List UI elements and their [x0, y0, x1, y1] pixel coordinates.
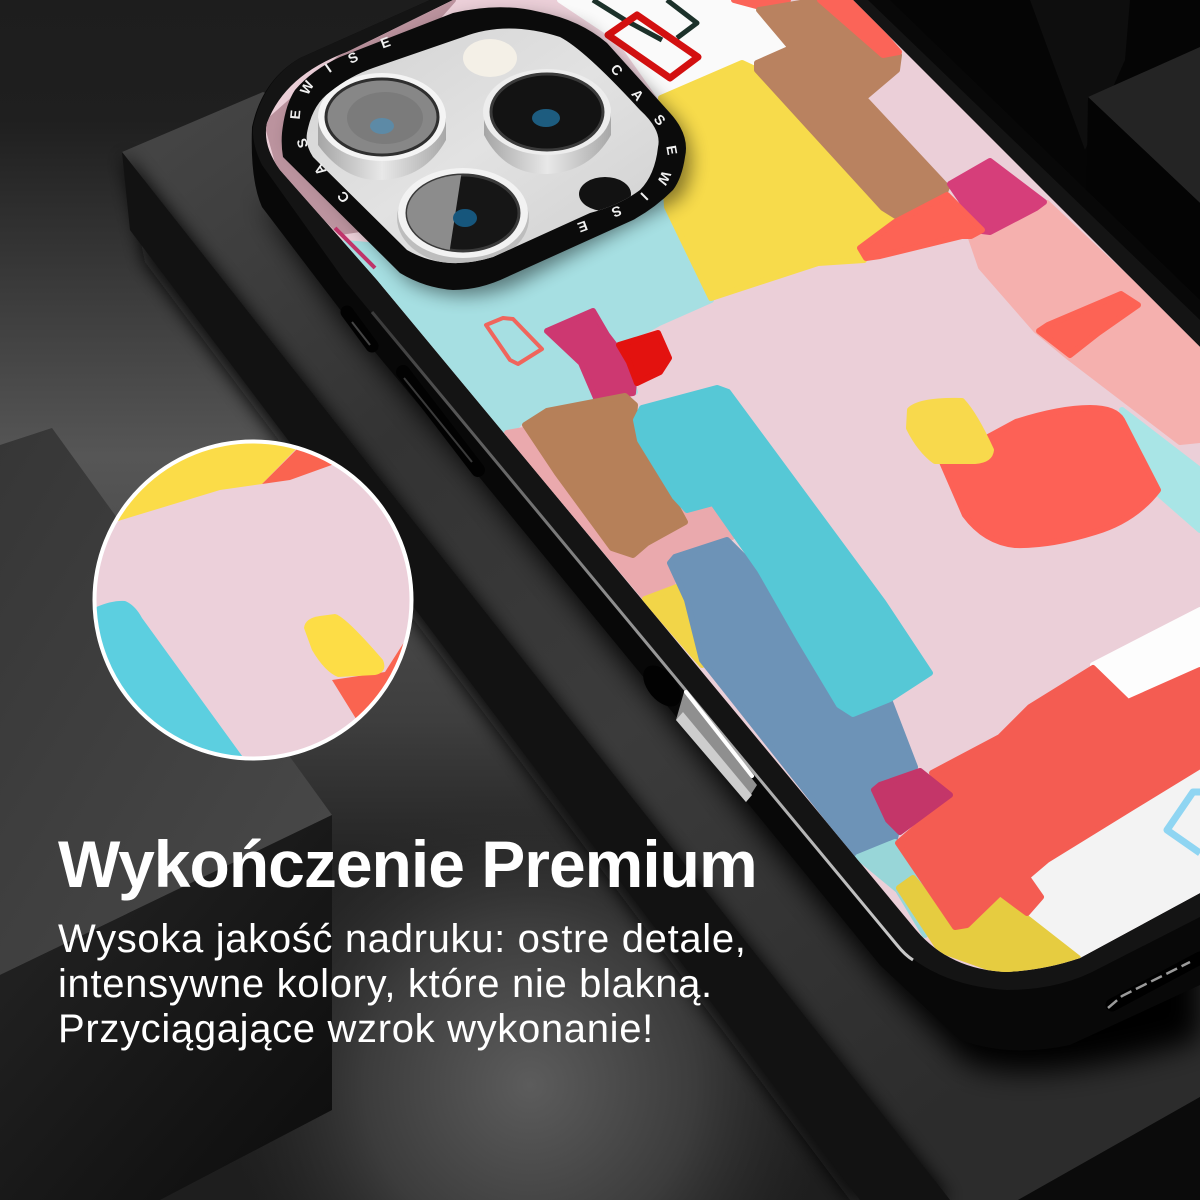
brand text on camera ring: W [654, 169, 675, 188]
print: magenta trim near camera [335, 228, 375, 268]
background pedestal: upper right block [1085, 47, 1200, 420]
print: slate blue [670, 540, 915, 857]
brand text on camera ring: S [293, 137, 311, 150]
print: aqua right [1122, 410, 1200, 530]
brand text on camera ring: C [607, 61, 626, 79]
brand text on camera ring: E [576, 218, 590, 236]
print: white top [560, 0, 791, 98]
print: muted pink edge [267, 0, 453, 232]
print: brown block [525, 396, 685, 555]
print: yellow bottom [899, 878, 1078, 974]
charging port [1108, 958, 1200, 1008]
print: coral top [820, 0, 899, 55]
description text [58, 917, 747, 1051]
print: crimson block [547, 311, 634, 398]
brand text on camera ring: C [334, 188, 353, 206]
print: yellow small [645, 585, 702, 665]
brand text on camera ring [287, 33, 681, 236]
brand text on camera ring: W [296, 77, 317, 97]
lower left block [0, 428, 332, 1200]
print: orange wedge [860, 195, 982, 258]
print: coral top left [734, 0, 788, 7]
print: red block [619, 333, 669, 383]
print: turquoise [636, 388, 930, 714]
print: magenta [950, 161, 1044, 232]
brand text on camera ring: E [663, 144, 681, 156]
brand text on camera ring: E [378, 33, 392, 51]
brand text on camera ring: S [345, 48, 361, 67]
print: light pink right [971, 203, 1200, 442]
print: yellow [661, 63, 895, 298]
brand text on camera ring: A [628, 86, 647, 104]
brand text on camera ring: A [310, 161, 329, 179]
print: coral stripe [1039, 294, 1138, 355]
description text: intensywne kolory, które nie blakną. [58, 962, 713, 1006]
print: magenta small [874, 771, 950, 832]
description text: Przyciągające wzrok wykonanie! [58, 1007, 654, 1051]
description text: Wysoka jakość nadruku: ostre detale, [58, 917, 747, 961]
brand text on camera ring: E [287, 109, 303, 120]
phone case [252, 0, 1200, 1084]
print: aqua [345, 190, 711, 436]
camera island [282, 7, 686, 290]
print: white lower band [1093, 610, 1200, 700]
heading: Wykończenie Premium [58, 827, 757, 901]
brand text on camera ring: I [322, 60, 334, 76]
print: coral blob [942, 408, 1158, 545]
silver button [636, 659, 688, 713]
magnified print detail circle [90, 430, 420, 770]
phone shadow [262, 200, 1200, 1072]
side buttons [347, 312, 757, 802]
dark upper right backdrop [780, 0, 1200, 420]
camera ring [282, 7, 686, 290]
camera lens bottom [397, 168, 529, 265]
black lower right corner [1018, 1097, 1200, 1200]
printed back [266, 0, 1200, 972]
camera shadow on print [290, 16, 691, 296]
camera lens left [318, 73, 446, 180]
print: white bottom [1025, 768, 1200, 958]
print: aqua bottom [858, 842, 925, 935]
print: salmon under brown [507, 420, 732, 600]
floor light pool [200, 760, 900, 1200]
microphone [579, 177, 631, 211]
flash [463, 39, 517, 77]
case front rim [253, 0, 1200, 990]
brand text on camera ring: S [610, 203, 624, 221]
print: outline shapes [593, 0, 697, 40]
print: red large [898, 668, 1200, 927]
rim highlight [372, 312, 913, 960]
print: brown [757, 0, 947, 218]
camera lens right [483, 69, 611, 174]
print: yellow blob [909, 401, 991, 461]
brand text on camera ring: I [638, 190, 652, 204]
central pedestal side face [122, 152, 950, 1200]
brand text on camera ring: S [651, 111, 669, 129]
case side body [252, 0, 1200, 1050]
camera plate [307, 28, 659, 263]
